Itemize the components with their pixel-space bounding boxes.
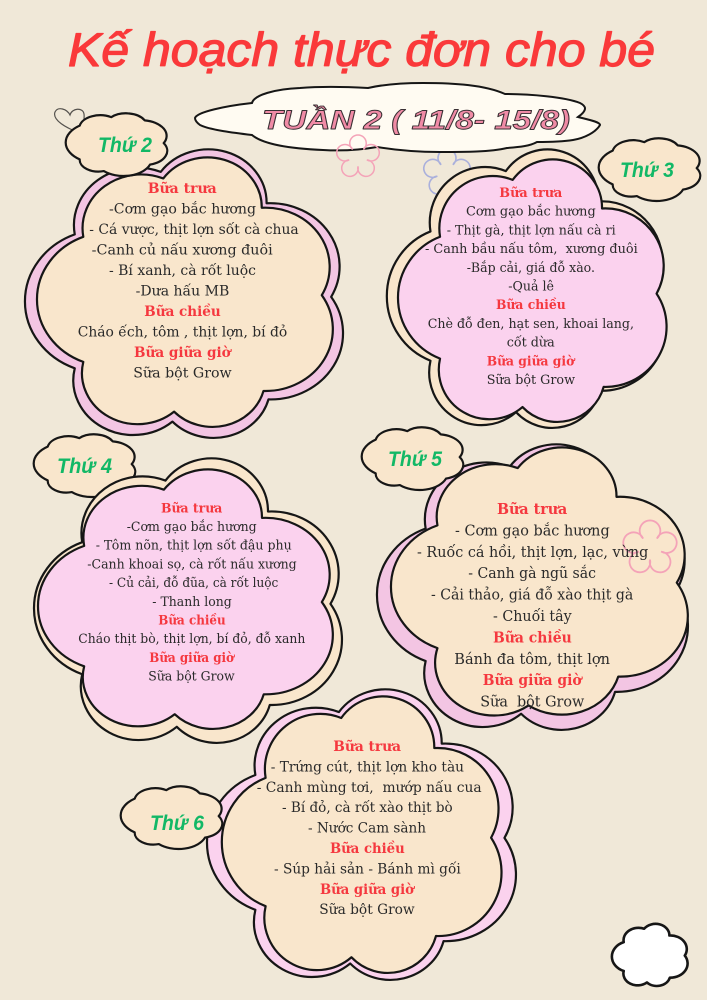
menu text: Thứ 2: -Cơm gạo bắc hương — [109, 200, 256, 218]
menu text: Thứ 2: - Cá vược, thịt lợn sốt cà chua — [89, 221, 299, 238]
menu text: Thứ 5: - Canh gà ngũ sắc — [468, 564, 596, 582]
label text: Thứ 2 — [98, 134, 152, 157]
menu text: Thứ 5 — [417, 501, 648, 711]
icon: heart outline — [55, 109, 84, 133]
label text: Thứ 5 — [388, 448, 442, 471]
menu text: Thứ 5: - Cải thảo, giá đỗ xào thịt gà — [431, 587, 634, 604]
menu text: Thứ 4 — [78, 501, 305, 685]
icon: pink flower top — [337, 135, 379, 176]
menu text: Thứ 3: Chè đỗ đen, hạt sen, khoai lang, — [428, 316, 634, 332]
menu text: Thứ 4: -Cơm gạo bắc hương — [127, 519, 257, 535]
menu text: Thứ 3: Bữa giữa giờ — [487, 354, 576, 369]
menu text: Thứ 2: Bữa chiều — [144, 303, 221, 320]
menu text: Thứ 3: -Quả lê — [508, 280, 554, 294]
banner: week — [195, 83, 600, 152]
menu text: Thứ 4: Bữa trưa — [161, 501, 223, 516]
menu text: Thứ 4: Bữa chiều — [158, 612, 226, 628]
menu text: Thứ 2: Bữa giữa giờ — [134, 344, 232, 361]
menu text: Thứ 3: Cơm gạo bắc hương — [466, 204, 596, 220]
panel: Thứ 2 label cloud — [66, 113, 167, 176]
panel: Thứ 6 label cloud — [121, 786, 222, 849]
title: Kế hoạch thực đơn cho bé — [68, 23, 655, 76]
menu text: Thứ 5: Bữa trưa — [497, 501, 568, 518]
menu text: Thứ 6: - Bí đỏ, cà rốt xào thịt bò — [282, 799, 453, 816]
menu text: Thứ 3: Bữa trưa — [499, 186, 563, 201]
panel: Thứ 3 — [387, 149, 667, 428]
panel: Thứ 3 label cloud — [599, 138, 700, 201]
panel: Thứ 5 — [377, 444, 688, 730]
menu text: Thứ 6: - Canh mùng tơi, mướp nấu cua — [257, 779, 482, 796]
menu text: Thứ 4: -Canh khoai sọ, cà rốt nấu xương — [87, 556, 297, 572]
panel: Thứ 4 — [34, 458, 342, 743]
menu text: Thứ 2: -Dưa hấu MB — [136, 282, 229, 300]
menu text: Thứ 2: Sữa bột Grow — [133, 366, 232, 382]
menu text: Thứ 5: - Cơm gạo bắc hương — [455, 521, 610, 539]
menu text: Thứ 4: - Tôm nõn, thịt lợn sốt đậu phụ — [96, 538, 292, 554]
menu text: Thứ 5: Bữa chiều — [493, 629, 572, 646]
menu text: Thứ 2: - Bí xanh, cà rốt luộc — [109, 262, 256, 279]
menu text: Thứ 4: Bữa giữa giờ — [149, 651, 235, 666]
menu text: Thứ 6: Bữa chiều — [330, 840, 405, 857]
menu text: Thứ 4: Sữa bột Grow — [148, 670, 235, 685]
menu text: Thứ 3: Sữa bột Grow — [487, 373, 575, 388]
menu text: Thứ 4: Cháo thịt bò, thịt lợn, bí đỏ, đỗ xanh — [78, 631, 305, 647]
menu text: Thứ 6: - Súp hải sản - Bánh mì gối — [274, 860, 461, 877]
menu text: Thứ 3: - Thịt gà, thịt lợn nấu cà ri — [447, 222, 616, 238]
menu text: Thứ 4: - Củ cải, đỗ đũa, cà rốt luộc — [109, 575, 278, 591]
panel: Thứ 2 — [25, 149, 343, 438]
panel: Thứ 4 label cloud — [34, 434, 135, 497]
menu text: Thứ 6: Bữa giữa giờ — [320, 881, 416, 898]
menu text: Thứ 2 — [78, 180, 299, 382]
label text: Thứ 3 — [620, 159, 674, 182]
menu text: Thứ 2: Cháo ếch, tôm , thịt lợn, bí đỏ — [78, 324, 287, 340]
menu text: Thứ 6: Bữa trưa — [333, 738, 401, 755]
label text: Thứ 4 — [57, 455, 112, 478]
menu text: Thứ 5: - Chuối tây — [493, 608, 572, 625]
menu text: Thứ 6: - Nước Cam sành — [308, 820, 426, 837]
menu text: Thứ 3: cốt dừa — [507, 335, 555, 351]
menu text: Thứ 5: - Ruốc cá hồi, thịt lợn, lạc, vừng — [417, 544, 648, 561]
menu text: Thứ 2: Bữa trưa — [148, 180, 217, 197]
menu text: Thứ 3: -Bắp cải, giá đỗ xào. — [467, 260, 595, 276]
label text: Thứ 6 — [150, 812, 204, 835]
menu text: Thứ 3 — [425, 186, 638, 388]
banner text: TUẦN 2 ( 11/8- 15/8) — [262, 104, 570, 135]
menu text: Thứ 5: Bữa giữa giờ — [483, 672, 583, 689]
menu text: Thứ 5: Bánh đa tôm, thịt lợn — [454, 651, 610, 668]
menu text: Thứ 3: - Canh bầu nấu tôm, xương đuôi — [425, 241, 638, 257]
icon: pink flower — [623, 520, 677, 572]
menu text: Thứ 2: -Canh củ nấu xương đuôi — [92, 242, 273, 258]
panel: Thứ 6 — [207, 689, 516, 980]
panel: Thứ 5 label cloud — [362, 427, 463, 490]
icon: blue flower — [424, 149, 470, 194]
menu text: Thứ 4: - Thanh long — [152, 595, 232, 610]
menu text: Thứ 6: Sữa bột Grow — [319, 902, 415, 918]
menu text: Thứ 5: Sữa bột Grow — [480, 694, 585, 711]
menu text: Thứ 3: Bữa chiều — [496, 297, 566, 313]
menu text: Thứ 6 — [257, 738, 482, 918]
icon: small white cloud — [612, 924, 688, 986]
menu text: Thứ 6: - Trứng cút, thịt lợn kho tàu — [271, 758, 464, 775]
